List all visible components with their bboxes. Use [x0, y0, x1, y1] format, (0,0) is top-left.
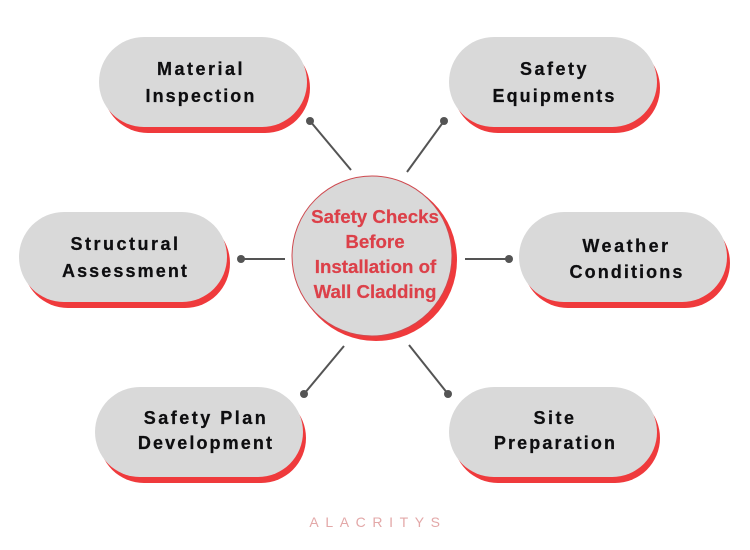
central circle: Safety Checks Before Installation of Wall Cladding: [292, 176, 457, 341]
connector: to Safety Equipments: [407, 117, 448, 172]
node: Site Preparation: Site: [533, 408, 577, 428]
node: Site Preparation: Preparation: [494, 433, 617, 453]
node: Weather Conditions: Weather: [582, 236, 671, 256]
central circle: Safety Checks Before Installation of Wall Cladding: Wall Cladding: [314, 281, 436, 302]
node: Site Preparation: [449, 387, 660, 483]
central circle: Safety Checks Before Installation of Wall Cladding: Installation of: [315, 256, 437, 277]
node: Safety Equipments: Safety: [520, 59, 589, 79]
connector: to Structural Assessment: [237, 255, 285, 263]
node: Weather Conditions: [519, 212, 730, 308]
node: Safety Plan Development: Development: [138, 433, 274, 453]
brand: ALACRITYS: ALACRITYS: [309, 514, 447, 530]
node: Material Inspection: Material: [157, 59, 245, 79]
node: Weather Conditions: Conditions: [570, 262, 684, 282]
central circle: Safety Checks Before Installation of Wall Cladding: Safety Checks: [311, 206, 439, 227]
node: Safety Equipments: Equipments: [492, 86, 617, 106]
connector: to Safety Plan Development: [300, 346, 344, 398]
node: Structural Assessment: Assessment: [62, 261, 189, 281]
connector: to Material Inspection: [306, 117, 351, 170]
connector: to Site Preparation: [409, 345, 452, 398]
node: Safety Plan Development: [95, 387, 306, 483]
node: Material Inspection: Inspection: [145, 86, 257, 106]
connector: to Weather Conditions: [465, 255, 513, 263]
node: Structural Assessment: Structural: [70, 234, 181, 254]
node: Material Inspection: [99, 37, 310, 133]
node: Structural Assessment: [19, 212, 230, 308]
central circle: Safety Checks Before Installation of Wall Cladding: Before: [345, 231, 405, 252]
node: Safety Equipments: [449, 37, 660, 133]
node: Safety Plan Development: Safety Plan: [144, 408, 268, 428]
